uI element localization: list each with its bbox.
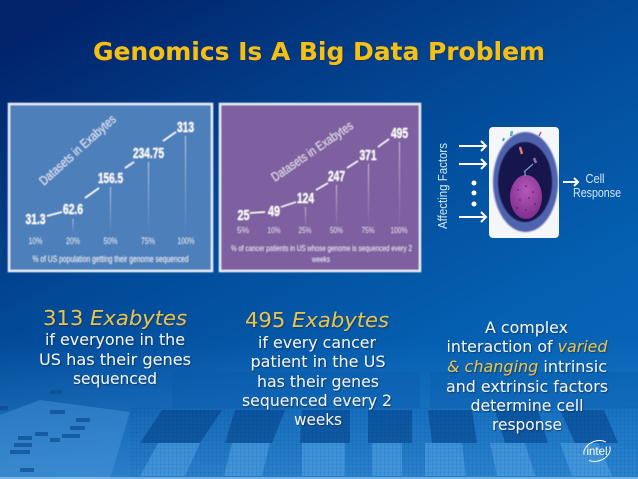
x labels xyxy=(28,236,194,246)
panel: US population chart xyxy=(9,104,212,271)
data values xyxy=(26,120,194,228)
text block: complex interaction: interaction of varied xyxy=(446,337,608,356)
data values: 62.6 xyxy=(63,202,83,218)
stat heading: 495 Exabytes xyxy=(245,308,389,332)
x labels: 25% xyxy=(298,225,312,235)
x axis caption: % of cancer patients in US whose genome is sequenced every 2 xyxy=(231,243,412,253)
icon: intel logo: intel xyxy=(586,444,608,458)
data values: 371 xyxy=(360,148,376,164)
data values: 495 xyxy=(391,126,408,142)
x labels: 100% xyxy=(178,236,194,246)
data values: 124 xyxy=(297,191,314,207)
cell response label: Cell xyxy=(586,171,605,186)
text block: complex interaction: and extrinsic factors xyxy=(446,377,608,396)
x labels: 10% xyxy=(268,225,281,235)
x labels: 20% xyxy=(66,236,80,246)
icon: intel logo xyxy=(581,437,613,465)
data values: 31.3 xyxy=(26,212,46,228)
text block: 495 Exabytes xyxy=(242,308,392,429)
x labels: 50% xyxy=(104,236,118,246)
data values: 313 xyxy=(177,120,194,136)
text block: 313 Exabytes xyxy=(39,306,191,388)
drop lines xyxy=(72,136,186,233)
description: if every cancer xyxy=(258,333,376,352)
x labels xyxy=(237,225,408,235)
x labels: 75% xyxy=(362,225,375,235)
data values: 25 xyxy=(238,208,250,224)
text block: complex interaction: & changing intrinsic xyxy=(447,357,607,376)
text block: complex interaction: A complex xyxy=(485,318,568,337)
description: sequenced every 2 xyxy=(242,391,392,410)
data values xyxy=(238,126,408,224)
axis title: Datasets in Exabytes xyxy=(36,111,119,188)
axis title: Datasets in Exabytes xyxy=(268,118,356,184)
affecting factors label: Affecting Factors xyxy=(435,143,450,229)
description: weeks xyxy=(294,410,342,429)
x labels: 75% xyxy=(141,236,155,246)
description: has their genes xyxy=(257,372,379,391)
text block: complex interaction: response xyxy=(492,415,562,434)
data values: 156.5 xyxy=(98,171,123,187)
x labels: 100% xyxy=(390,225,408,235)
x axis caption: weeks xyxy=(311,254,330,264)
description: sequenced xyxy=(73,369,157,388)
output arrow xyxy=(563,178,578,186)
panel: cancer patients chart xyxy=(220,104,420,271)
data values: 247 xyxy=(328,169,345,185)
x labels: 10% xyxy=(28,236,42,246)
input arrows xyxy=(459,141,486,222)
background wafer pattern xyxy=(0,340,638,479)
x axis caption: % of US population getting their genome sequenced xyxy=(32,254,188,264)
x labels: 5% xyxy=(237,225,250,235)
description: US has their genes xyxy=(39,350,191,369)
stat heading: 313 Exabytes xyxy=(43,306,187,330)
connectors xyxy=(250,139,389,213)
description: patient in the US xyxy=(250,352,386,371)
description: if everyone in the xyxy=(45,330,185,349)
data values: 49 xyxy=(268,204,280,220)
x labels: 50% xyxy=(330,225,343,235)
cell response label: Response xyxy=(573,185,621,200)
data values: 234.75 xyxy=(133,146,164,162)
icon: cell diagram xyxy=(489,127,559,238)
ellipsis dots xyxy=(472,180,476,206)
drop lines xyxy=(305,142,400,227)
connectors xyxy=(47,132,176,216)
text block: complex interaction: determine cell xyxy=(470,396,584,415)
title: Genomics Is A Big Data Problem xyxy=(93,37,545,66)
